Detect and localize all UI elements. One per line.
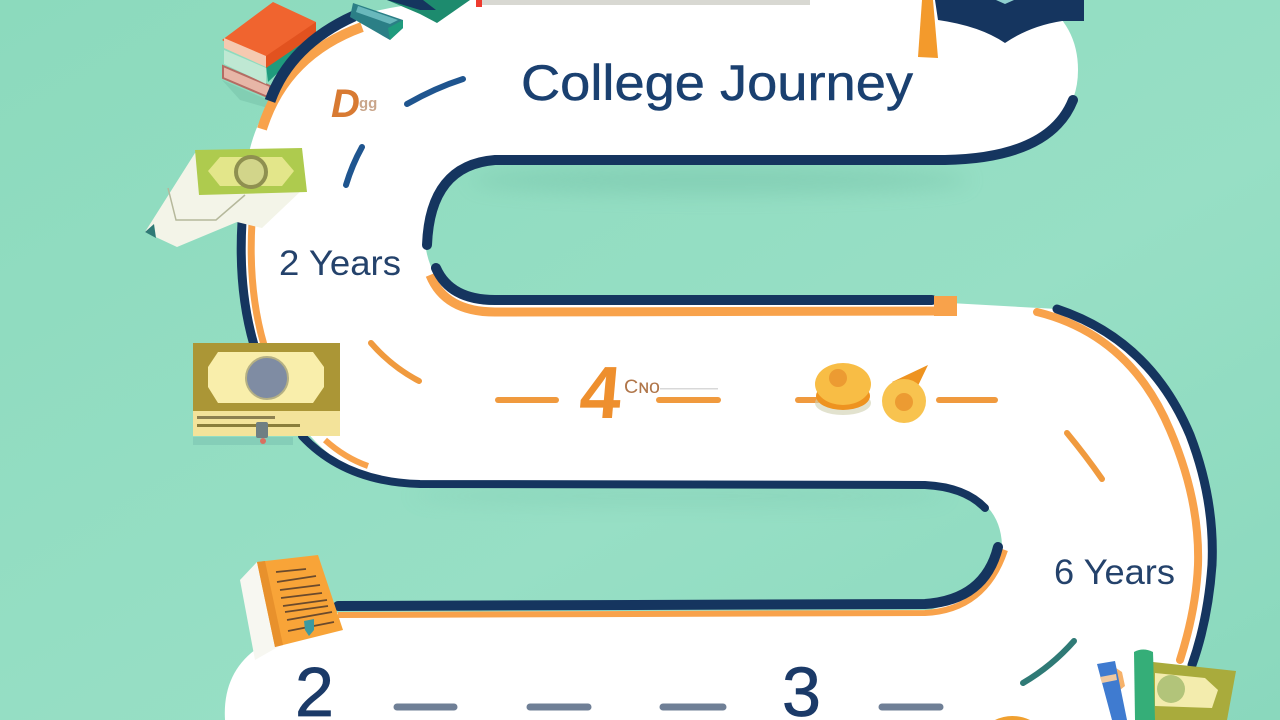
icon: books and banknote, bottom right	[1097, 650, 1236, 720]
road edge: upper right return	[427, 100, 1073, 245]
icon: green book at top	[387, 0, 482, 23]
road edge: inner switchback	[430, 268, 957, 316]
dashes: blue	[346, 79, 463, 185]
icon: stacked books	[222, 2, 316, 108]
dashes: grey	[397, 704, 940, 710]
icon: green banknote on white wrapper	[145, 148, 307, 247]
number 4 with garbled label: 4	[577, 351, 625, 434]
icon: gold banknote diploma	[193, 343, 340, 445]
title: College Journey	[521, 55, 913, 111]
road edge: right curve	[1037, 309, 1212, 665]
top strip	[480, 0, 810, 5]
road edge: top-left curve	[262, 16, 362, 129]
icon: teal stapler	[350, 3, 403, 40]
road edge: bottom return	[338, 547, 1005, 615]
stylised mark: 1	[331, 82, 377, 126]
dashes: orange	[371, 343, 1102, 479]
number 4 with garbled label: Cɴo	[624, 377, 660, 398]
stylised mark: 1: D	[331, 82, 360, 126]
dash: teal	[1023, 641, 1074, 683]
icon: coin, bottom edge	[995, 716, 1030, 720]
winding white road	[225, 0, 1212, 720]
stylised mark: 1: gg	[359, 95, 377, 112]
road edge: left vertical	[241, 222, 264, 345]
road edge: middle return	[302, 436, 985, 508]
icon: orange document	[240, 555, 343, 660]
icon: gold coins	[815, 363, 928, 423]
number 4 with garbled label	[577, 351, 718, 434]
icon: graduation cap	[918, 0, 1084, 58]
label: 2 years: 2 Years	[279, 244, 401, 283]
label: 6 years: 6 Years	[1054, 553, 1175, 592]
